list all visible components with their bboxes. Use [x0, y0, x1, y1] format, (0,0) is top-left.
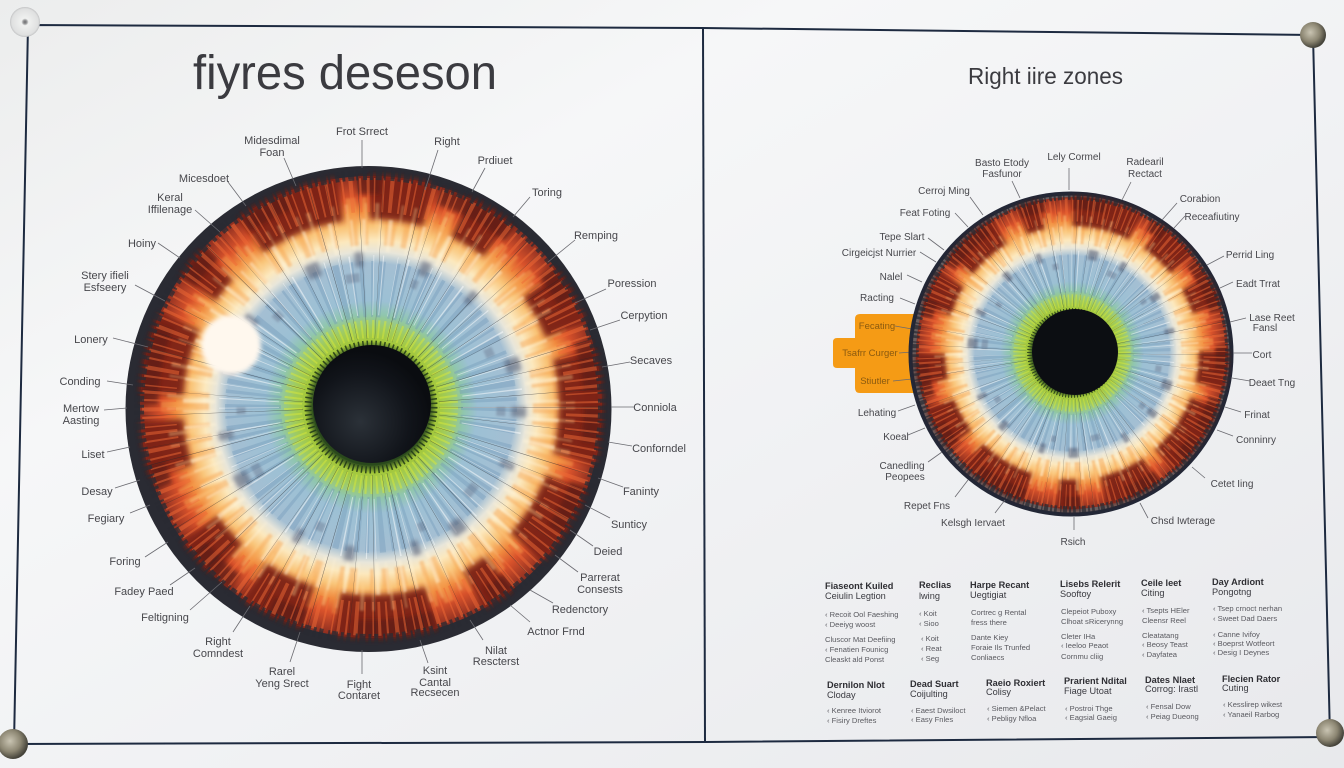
legend block row 2 col 1: ‹ Kenree Itviorot [827, 706, 882, 715]
right label: Feat Foting: Feat Foting [900, 208, 950, 219]
right label: Kelsgh Iervaet: Kelsgh Iervaet [941, 518, 1005, 529]
legend block row 1 col 6: ‹ Boeprst Wotfeort [1213, 639, 1275, 648]
left label: Parrerat Consests [555, 555, 623, 596]
legend block row 1 col 6: Pongotng [1212, 587, 1251, 597]
legend block row 1 col 1: ‹ Deeiyg woost [825, 620, 876, 629]
left label: Fegiary: Fegiary [88, 513, 125, 525]
right label: Frinat [1225, 407, 1270, 421]
legend block row 1 col 2: ‹ Koit [921, 634, 940, 643]
pupil [313, 345, 431, 463]
legend block row 2 col 2: Coijulting [910, 689, 948, 699]
legend block row 2 col 2: Dead Suart [910, 679, 959, 689]
left label: Nilat Rescterst: Nilat [485, 645, 507, 657]
icon: pin bottom left [0, 729, 28, 759]
legend block row 1 col 1: Cleaskt ald Ponst [825, 655, 885, 664]
right title: Right iire zones [968, 63, 1123, 89]
legend block row 2 col 5: ‹ Fensal Dow [1146, 702, 1191, 711]
right label: Racting [860, 293, 915, 304]
legend block row 1 col 4: ‹ Ieeloo Peaot [1061, 641, 1109, 650]
legend block row 2 col 5: ‹ Peiag Dueong [1146, 712, 1199, 721]
left label: Right Comndest: Comndest [193, 648, 243, 660]
legend block row 1 col 5: Cleensr Reel [1142, 616, 1186, 625]
legend block row 1 col 5: ‹ Dayfatea [1142, 650, 1178, 659]
legend block row 1 col 5: ‹ Beosy Teast [1142, 640, 1189, 649]
right label: Nalel: Nalel [880, 272, 902, 283]
left label: Conforndel [608, 442, 686, 455]
right label: Feat Foting [900, 208, 968, 227]
left label: Parrerat Consests: Consests [577, 584, 623, 596]
legend block row 1 col 3: fress there [971, 618, 1007, 627]
right label: Canedling Peopees: Canedling [879, 461, 925, 472]
left label: Feltigning [141, 582, 222, 624]
left label: Redenctory [530, 590, 609, 616]
legend block row 1 col 6: Day Ardiont [1212, 577, 1264, 587]
left label: Stery ifieli Esfseery [81, 270, 165, 301]
right label: Cerroj Ming [918, 186, 983, 215]
left label: Toring [513, 187, 562, 217]
legend block row 1 col 3: Conliaecs [971, 653, 1005, 662]
legend block row 2 col 3: Raeio Roxiert [986, 678, 1045, 688]
legend block row 2 col 3: Colisy [986, 687, 1011, 697]
left label: Liset [81, 447, 130, 461]
panel: left iris chart [60, 47, 686, 702]
left label: Sunticy: Sunticy [611, 519, 648, 531]
right label: Canedling Peopees: Peopees [885, 472, 925, 483]
right label: Nalel [880, 272, 922, 283]
legend block row 1 col 3: Cortrec g Rental [971, 608, 1027, 617]
legend block row 1 col 2: lwing [919, 591, 940, 601]
right label: Perrid Ling [1207, 250, 1274, 265]
left label: Fight Contaret: Contaret [338, 690, 380, 702]
left label: Frot Srrect [336, 126, 388, 168]
right label: Lase Reet Fansl: Fansl [1253, 323, 1277, 334]
left label: Right Comndest [193, 606, 250, 660]
left label: Mertow Aasting [63, 403, 127, 427]
left label: Conforndel: Conforndel [632, 443, 686, 455]
legend block row 1 col 2: ‹ Koit [919, 609, 938, 618]
legend block row 1 col 3: Uegtigiat [970, 590, 1007, 600]
left title: fiyres deseson [193, 47, 497, 100]
orange callout tab [833, 314, 915, 393]
right label: Radearil Rectact: Rectact [1128, 169, 1162, 180]
left label: Conniola: Conniola [633, 402, 678, 414]
legend block row 2 col 3: ‹ Siemen &Pelact [987, 704, 1047, 713]
legend block row 2 col 1: Dernilon Nlot [827, 680, 885, 690]
right label: Chsd Iwterage [1140, 503, 1216, 527]
left label: Mertow Aasting: Mertow [63, 403, 99, 415]
legend block row 1 col 6: ‹ Canne Ivifoy [1213, 630, 1260, 639]
right label: Conninry [1217, 430, 1276, 446]
legend block row 1 col 4: Sooftoy [1060, 589, 1092, 599]
left label: Fadey Paed: Fadey Paed [114, 586, 174, 598]
left label: Conniola [611, 402, 678, 414]
pupil [1032, 309, 1118, 395]
legend block row 1 col 4: Lisebs Relerit [1060, 579, 1120, 589]
right label: Basto Etody Fasfunor: Basto Etody [975, 158, 1029, 169]
left label: Secaves [602, 355, 673, 367]
legend block row 2 col 1 [827, 680, 885, 725]
legend block row 2 col 4: ‹ Eagsial Gaeig [1065, 713, 1117, 722]
left label: Right Comndest: Right [205, 636, 231, 648]
legend block row 1 col 2 [919, 580, 951, 663]
right label: Conninry: Conninry [1236, 435, 1276, 446]
left label: Deied: Deied [594, 546, 622, 558]
left label: Actnor Frnd: Actnor Frnd [527, 626, 585, 638]
left label: Feltigning: Feltigning [141, 612, 189, 624]
left label: Cerpytion [590, 310, 668, 330]
left label: Frot Srrect: Frot Srrect [336, 126, 388, 138]
left label: Conding [60, 376, 133, 388]
left label: Foring: Foring [109, 556, 141, 568]
legend block row 1 col 1: Fiaseont Kuiled [825, 581, 893, 591]
legend block row 2 col 3: ‹ Pebligy Nfloa [987, 714, 1037, 723]
legend block row 2 col 4: ‹ Postroi Thge [1065, 704, 1113, 713]
legend block row 2 col 1: Cloday [827, 690, 856, 700]
left label: Parrerat Consests: Parrerat [580, 572, 620, 584]
left label: Foring [109, 542, 168, 568]
legend block row 1 col 6 [1212, 577, 1282, 657]
icon: pin top right [1300, 22, 1326, 48]
legend block row 1 col 1: Cluscor Mat Deefiing [825, 635, 895, 644]
legend block row 2 col 2: ‹ Easy Fnles [911, 715, 953, 724]
right label: Racting: Racting [860, 293, 894, 304]
left label: Actnor Frnd [510, 605, 585, 638]
right label: Radearil Rectact [1122, 157, 1164, 200]
legend block row 2 col 1: ‹ Fisiry Dreftes [827, 716, 877, 725]
legend block row 2 col 3 [986, 678, 1047, 723]
right label: Perrid Ling: Perrid Ling [1226, 250, 1274, 261]
legend block row 1 col 2: ‹ Sioo [919, 619, 939, 628]
legend block row 1 col 1 [825, 581, 898, 664]
legend block row 1 col 3: Foraie Ils Trunfed [971, 643, 1030, 652]
right label: Repet Fns [904, 480, 968, 512]
left label: Nilat Rescterst: Rescterst [473, 656, 519, 668]
left iris diagram [126, 166, 612, 652]
right label: Basto Etody Fasfunor: Fasfunor [982, 169, 1022, 180]
legend block row 2 col 6: ‹ Yanaeil Rarbog [1223, 710, 1279, 719]
left label: Deied [570, 530, 622, 558]
right label: Cort: Cort [1253, 350, 1272, 361]
right label: Koeal [883, 428, 925, 443]
orange callout tab: Fecating [859, 321, 895, 332]
legend block row 1 col 4: Cleter IHa [1061, 632, 1096, 641]
legend block row 1 col 3: Harpe Recant [970, 580, 1029, 590]
left label: Fadey Paed [114, 568, 195, 598]
legend block row 1 col 4: Cornmu cliig [1061, 652, 1103, 661]
left label: Keral Iffilenage: Iffilenage [148, 204, 192, 216]
right iris diagram [854, 135, 1290, 571]
right label: Radearil Rectact: Radearil [1126, 157, 1164, 168]
right label: Kelsgh Iervaet [941, 500, 1005, 529]
left label: Keral Iffilenage [148, 192, 220, 232]
left label: Stery ifieli Esfseery: Stery ifieli [81, 270, 129, 282]
left label: Rarel Yeng Srect: Yeng Srect [255, 678, 309, 690]
right label: Tepe Slart: Tepe Slart [879, 232, 925, 243]
legend block row 1 col 3 [970, 580, 1030, 662]
right label: Lase Reet Fansl: Lase Reet [1249, 313, 1295, 324]
legend block row 2 col 4: Fiage Utoat [1064, 686, 1112, 696]
left label: Desay [81, 480, 140, 498]
right label: Cirgeicjst Nurrier: Cirgeicjst Nurrier [842, 248, 917, 259]
legend block row 2 col 6: Cuting [1222, 683, 1249, 693]
right label: Canedling Peopees [879, 452, 942, 483]
right label: Chsd Iwterage: Chsd Iwterage [1151, 516, 1216, 527]
left label: Fegiary [88, 505, 150, 525]
left label: Ksint Cantal Recsecen [411, 640, 459, 699]
left label: Poression: Poression [608, 278, 656, 290]
left label: Ksint Cantal Recsecen: Cantal [419, 677, 451, 689]
right label: Receafiutiny [1174, 212, 1240, 228]
left label: Toring: Toring [532, 187, 562, 199]
legend table [825, 577, 1283, 725]
right label: Lely Cormel [1047, 152, 1101, 190]
left label: Conding: Conding [60, 376, 100, 388]
legend block row 2 col 6: ‹ Kesslirep wikest [1223, 700, 1283, 709]
left label: Rarel Yeng Srect [255, 632, 309, 690]
left label: Right [425, 136, 460, 190]
legend block row 1 col 5: ‹ Tsepts HEler [1142, 606, 1190, 615]
legend block row 1 col 3: Dante Kiey [971, 633, 1008, 642]
right label: Koeal: Koeal [883, 432, 909, 443]
icon: pin bottom right [1316, 719, 1344, 747]
left label: Faninty [598, 478, 660, 498]
right label: Cirgeicjst Nurrier [842, 248, 936, 262]
left label: Lonery: Lonery [74, 334, 108, 346]
left label: Midesdimal Foan: Foan [259, 147, 285, 159]
legend block row 1 col 4: Clepeiot Puboxy [1061, 607, 1117, 616]
left label: Faninty: Faninty [623, 486, 660, 498]
left label: Ksint Cantal Recsecen: Ksint [423, 665, 447, 677]
left label: Redenctory: Redenctory [552, 604, 609, 616]
left label: Prdiuet [472, 155, 512, 192]
legend block row 1 col 1: ‹ Recoit Ool Faeshing [825, 610, 898, 619]
right label: Receafiutiny: Receafiutiny [1184, 212, 1240, 223]
left label: Ksint Cantal Recsecen: Recsecen [411, 687, 459, 699]
orange callout tab: Stiutler [860, 376, 890, 387]
left label: Micesdoet [179, 173, 246, 206]
right label: Lely Cormel: Lely Cormel [1047, 152, 1101, 163]
legend block row 2 col 5: Corrog: Irastl [1145, 684, 1198, 694]
left label: Keral Iffilenage: Keral [157, 192, 183, 204]
left label: Desay: Desay [81, 486, 113, 498]
left label: Lonery [74, 334, 148, 347]
left label: Micesdoet: Micesdoet [179, 173, 229, 185]
left label: Liset: Liset [81, 449, 105, 461]
left label: Secaves: Secaves [630, 355, 673, 367]
legend block row 1 col 5: Cleatatang [1142, 631, 1179, 640]
right label: Corabion: Corabion [1180, 194, 1220, 205]
legend block row 1 col 5 [1141, 578, 1190, 659]
left label: Midesdimal Foan [244, 135, 300, 186]
left label: Fight Contaret: Fight [347, 679, 371, 691]
legend block row 2 col 4: Prarient Ndital [1064, 676, 1127, 686]
legend block row 1 col 5: Citing [1141, 588, 1164, 598]
left label: Midesdimal Foan: Midesdimal [244, 135, 300, 147]
right label: Cetet Iing [1192, 467, 1253, 490]
right label: Frinat: Frinat [1244, 410, 1270, 421]
left label: Rarel Yeng Srect: Rarel [269, 666, 295, 678]
legend block row 1 col 6: ‹ Tsep crnoct nerhan [1213, 604, 1282, 613]
legend block row 1 col 6: ‹ Desig I Deynes [1213, 648, 1269, 657]
icon: pin top left [10, 7, 40, 37]
left label: Mertow Aasting: Aasting [63, 415, 99, 427]
right label: Lase Reet Fansl [1230, 313, 1295, 334]
left label: Hoiny: Hoiny [128, 238, 157, 250]
legend block row 1 col 1: ‹ Fenatien Founicg [825, 645, 888, 654]
left label: Sunticy [585, 505, 648, 531]
left label: Stery ifieli Esfseery: Esfseery [84, 282, 127, 294]
legend block row 1 col 2: Reclias [919, 580, 951, 590]
legend block row 1 col 2: ‹ Reat [921, 644, 943, 653]
left label: Hoiny [128, 238, 180, 258]
panel: right iris chart [825, 63, 1295, 725]
right label: Basto Etody Fasfunor [975, 158, 1029, 198]
left label: Right: Right [434, 136, 460, 148]
legend block row 1 col 1: Ceiulin Legtion [825, 591, 886, 601]
legend block row 2 col 5: Dates Nlaet [1145, 675, 1195, 685]
legend block row 2 col 5 [1145, 675, 1199, 721]
right label: Cerroj Ming: Cerroj Ming [918, 186, 970, 197]
right label: Cort [1233, 350, 1272, 361]
right label: Cetet Iing: Cetet Iing [1211, 479, 1253, 490]
left label: Remping [548, 230, 618, 262]
legend block row 1 col 4: Clhoat sRicerynng [1061, 617, 1123, 626]
right label: Rsich [1060, 517, 1086, 548]
legend block row 2 col 6 [1222, 674, 1283, 719]
legend block row 1 col 4 [1060, 579, 1123, 661]
right label: Rsich: Rsich [1060, 537, 1086, 548]
glare highlight [201, 315, 261, 375]
right label: Lehating: Lehating [858, 408, 896, 419]
right label: Tepe Slart [879, 232, 944, 250]
legend block row 2 col 6: Flecien Rator [1222, 674, 1281, 684]
right label: Lehating [858, 405, 915, 419]
right label: Corabion [1162, 194, 1220, 220]
legend block row 2 col 2: ‹ Eaest Dwsiloct [911, 706, 966, 715]
left label: Prdiuet: Prdiuet [478, 155, 512, 167]
right label: Repet Fns: Repet Fns [904, 501, 950, 512]
right label: Deaet Tng: Deaet Tng [1249, 378, 1295, 389]
left label: Poression [575, 278, 656, 303]
legend block row 2 col 4 [1064, 676, 1127, 722]
left label: Cerpytion: Cerpytion [620, 310, 668, 322]
orange callout tab: Tsafrr Curger [842, 348, 898, 359]
legend block row 1 col 5: Ceile leet [1141, 578, 1181, 588]
legend block row 1 col 2: ‹ Seg [921, 654, 939, 663]
left label: Fight Contaret [338, 650, 380, 702]
left label: Nilat Rescterst [470, 620, 519, 668]
left label: Remping: Remping [574, 230, 618, 242]
right label: Eadt Trrat: Eadt Trrat [1236, 279, 1280, 290]
legend block row 2 col 2 [910, 679, 966, 724]
legend block row 1 col 6: ‹ Sweet Dad Daers [1213, 614, 1277, 623]
